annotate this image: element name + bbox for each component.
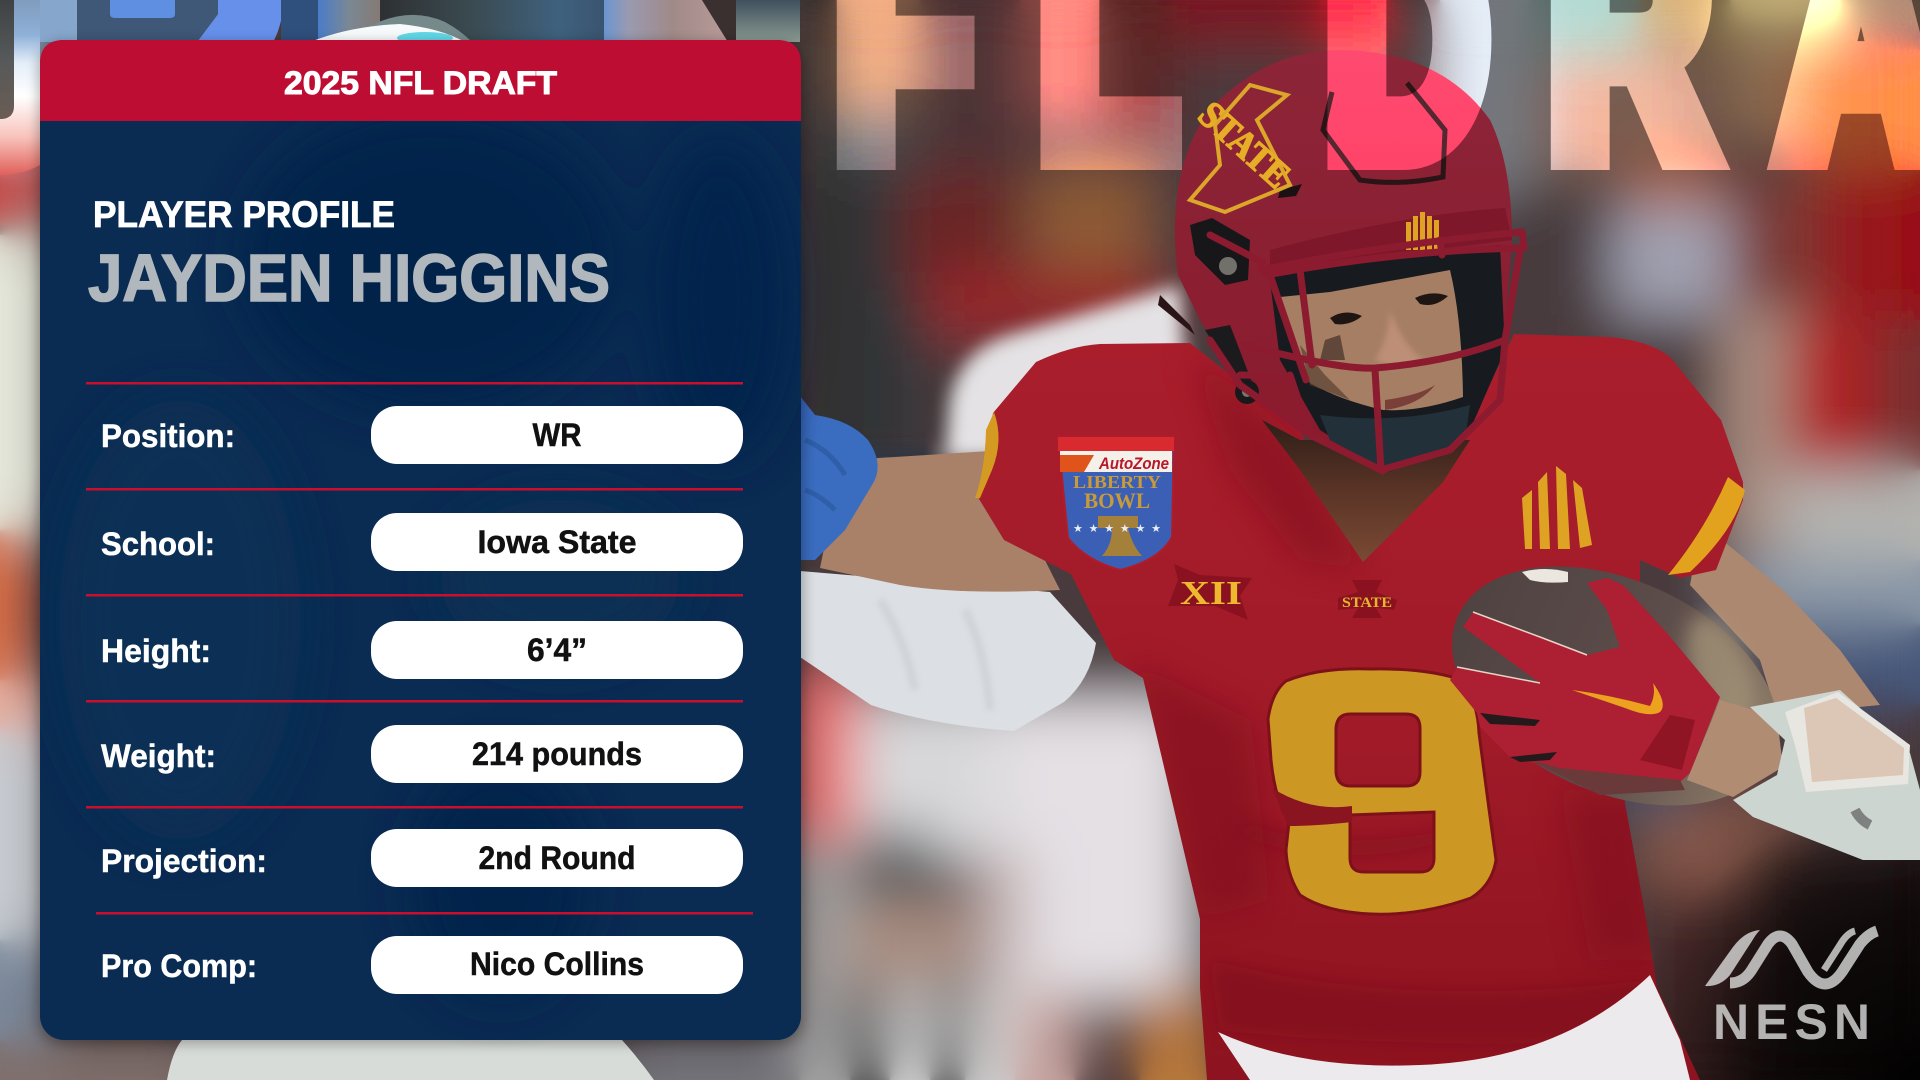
white pants xyxy=(1218,975,1690,1080)
face xyxy=(1280,270,1463,410)
bell xyxy=(1098,516,1142,556)
row: weight: Weight: xyxy=(101,738,216,774)
left letter stem and curve xyxy=(0,0,40,175)
football xyxy=(1415,519,1815,853)
NESN wordmark: NESN xyxy=(1713,994,1870,1050)
NESN wave mark xyxy=(1705,930,1877,986)
header title: 2025 NFL DRAFT xyxy=(284,65,557,101)
player wrist xyxy=(1687,700,1783,797)
sleeve gold stripe right xyxy=(1668,477,1745,575)
defender arm skin xyxy=(820,451,1060,592)
row: height: 6’4” xyxy=(527,632,587,668)
sleeve gold stripe left xyxy=(975,412,999,498)
row: position: Position: xyxy=(101,418,235,454)
defender behind the card xyxy=(167,1040,654,1080)
liberty bowl patch: AutoZone xyxy=(1098,454,1169,473)
red glove with Nike swoosh xyxy=(1450,578,1720,795)
swoosh xyxy=(1572,683,1663,714)
row: school: Iowa State xyxy=(478,524,636,560)
card header band xyxy=(40,40,801,121)
divider lines xyxy=(86,382,753,914)
row: weight xyxy=(101,725,743,783)
player right arm xyxy=(1690,530,1880,715)
player profile card xyxy=(38,40,804,1044)
liberty bowl patch: BOWL xyxy=(1084,488,1150,513)
player name: JAYDEN HIGGINS xyxy=(88,241,610,316)
row: school: School: xyxy=(101,526,215,562)
shoulder stripes xyxy=(1522,466,1592,549)
defender white sleeve xyxy=(800,571,1096,731)
player jersey xyxy=(975,334,1745,1080)
row: pro comp: Pro Comp: xyxy=(101,948,257,984)
helmet side clips xyxy=(1190,218,1250,285)
big 12 XII logo: XII xyxy=(1180,575,1242,612)
letter strip segments xyxy=(77,0,197,42)
iowa state chest logo: STATE xyxy=(1342,595,1392,611)
row: weight: 214 pounds xyxy=(472,736,642,772)
row: height: Height: xyxy=(101,633,211,669)
chin strap xyxy=(1320,405,1470,472)
neck xyxy=(1262,420,1470,562)
row: projection: 2nd Round xyxy=(478,840,636,876)
defender helmet top xyxy=(360,15,472,42)
row: pro comp xyxy=(101,936,743,994)
big 12 XII logo xyxy=(1168,564,1252,620)
ghosted lettering strip above the card xyxy=(0,0,800,175)
inner helmet dark padding xyxy=(1268,245,1505,470)
facemask bars xyxy=(1210,232,1524,275)
eyebrow: player profile: PLAYER PROFILE xyxy=(93,194,395,235)
white wristband with play card xyxy=(1733,690,1920,860)
shadow folds on jersey xyxy=(1130,350,1660,1043)
row: position: WR xyxy=(532,417,582,453)
NESN logo xyxy=(1705,930,1877,1050)
helmet I STATE logo: STATE xyxy=(1190,93,1298,197)
blue glove of defender xyxy=(800,396,878,560)
helmet dark vent xyxy=(1323,83,1445,182)
liberty bowl patch xyxy=(1058,437,1174,570)
iowa state chest logo xyxy=(1338,580,1397,618)
row: school xyxy=(101,513,743,571)
row: position xyxy=(101,406,743,464)
patch stars: ★ ★ ★ ★ ★ ★ xyxy=(1073,522,1161,535)
liberty bowl patch: LIBERTY xyxy=(1073,472,1161,492)
row: height xyxy=(101,621,743,679)
helmet visor band xyxy=(1270,208,1512,270)
helmet forehead stripes xyxy=(1406,212,1439,250)
row: projection: Projection: xyxy=(101,843,267,879)
jersey number 9 xyxy=(1268,669,1496,914)
crease forming the tail of the 9 xyxy=(1272,788,1352,826)
row: projection xyxy=(101,829,743,887)
defender white jersey at bottom xyxy=(167,1040,654,1080)
row: pro comp: Nico Collins xyxy=(470,946,644,982)
helmet xyxy=(1158,50,1524,475)
